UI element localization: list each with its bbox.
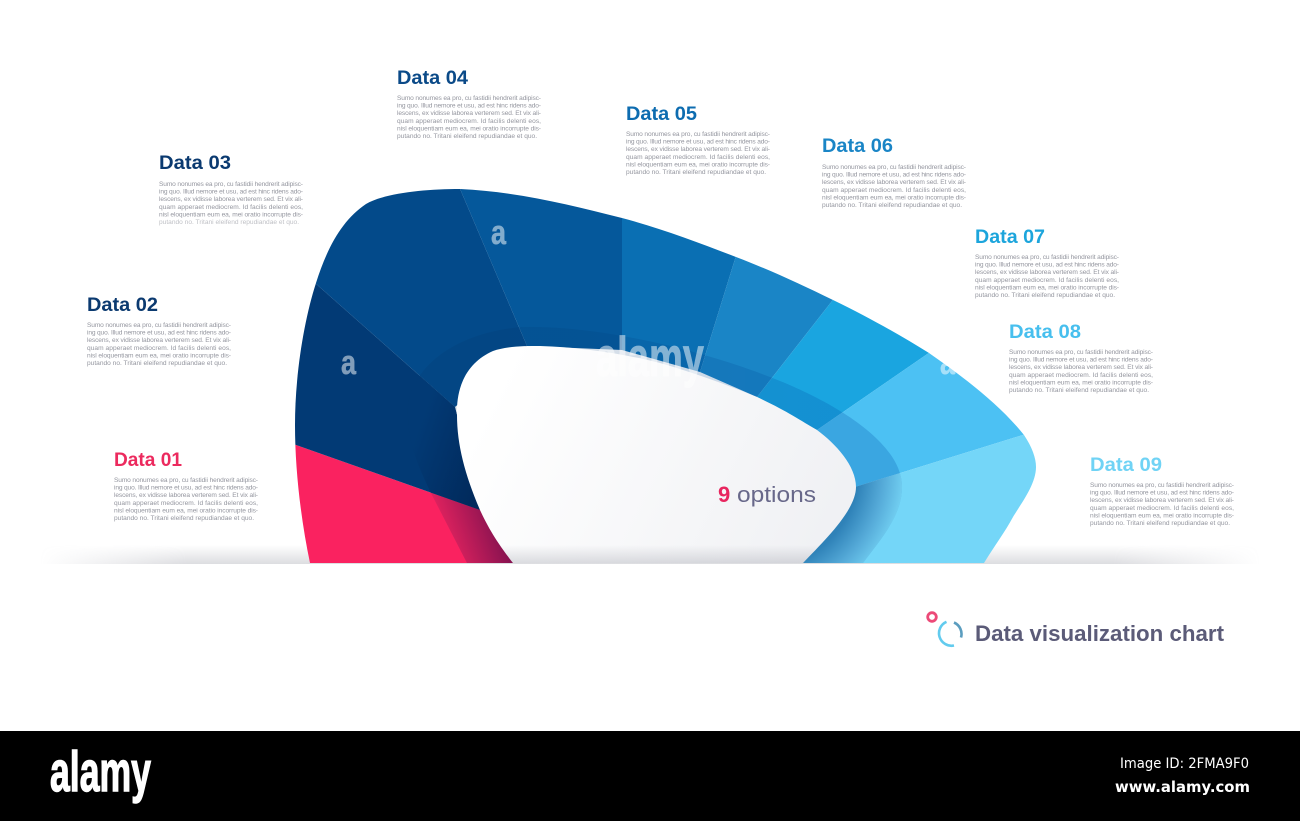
text block: Data 08: putando no. Tritani eleifend repudiandae et quo.	[1009, 387, 1149, 394]
text block: Data 01: nisl eloquentiam eum ea, mei oratio incorrupte dis-	[114, 507, 258, 514]
footer logo: Data visualization chart	[928, 613, 1225, 646]
segment 03	[316, 189, 527, 407]
text block: Data 03: ing quo. Illud nemore et usu, ad est hinc ridens ado-	[159, 189, 303, 196]
floor shade on inner shape	[504, 550, 814, 563]
text block: Data 06: Data 06	[822, 135, 893, 157]
text block: Data 02: lescens, ex vidisse laborea verterem sed. Et vix ali-	[87, 337, 231, 344]
ring shading on segment 02	[420, 376, 480, 510]
text block: Data 09: quam apperaet mediocrem. Id facilis delenti eos,	[1090, 505, 1234, 512]
text block: Data 02: nisl eloquentiam eum ea, mei oratio incorrupte dis-	[87, 352, 231, 359]
text block: Data 01: putando no. Tritani eleifend repudiandae et quo.	[114, 515, 254, 522]
segment 06	[700, 256, 833, 397]
text block: Data 05	[626, 103, 770, 176]
floor shadow	[76, 550, 1224, 564]
text block: Data 01	[114, 449, 258, 522]
icon: broken blue ring	[939, 622, 962, 646]
text block: Data 07: Sumo nonumes ea pro, cu fastidii hendrerit adipisc-	[975, 254, 1119, 261]
ring shading on segment 01	[431, 492, 513, 563]
text block: Data 09: ing quo. Illud nemore et usu, ad est hinc ridens ado-	[1090, 490, 1234, 497]
text block: Data 04: ing quo. Illud nemore et usu, ad est hinc ridens ado-	[397, 103, 541, 110]
watermark: alamy overlay: a	[940, 344, 956, 382]
text block: Data 01: Sumo nonumes ea pro, cu fastidii hendrerit adipisc-	[114, 477, 258, 484]
text block: Data 07: Data 07	[975, 226, 1045, 248]
text block: Data 04: Data 04	[397, 67, 468, 89]
text block: Data 09: lescens, ex vidisse laborea verterem sed. Et vix ali-	[1090, 497, 1234, 504]
text block: Data 02: Data 02	[87, 294, 158, 316]
text block: Data 02	[87, 294, 231, 367]
text block: Data 05: lescens, ex vidisse laborea verterem sed. Et vix ali-	[626, 146, 770, 153]
text block: Data 07	[975, 226, 1119, 299]
text block: Data 06: ing quo. Illud nemore et usu, ad est hinc ridens ado-	[822, 172, 966, 179]
text block: Data 01: Data 01	[114, 449, 182, 471]
website: www.alamy.com	[1115, 778, 1250, 796]
text block: Data 03: quam apperaet mediocrem. Id facilis delenti eos,	[159, 204, 303, 211]
image id: Image ID: 2FMA9F0	[1120, 756, 1249, 772]
watermark: alamy overlay	[341, 214, 956, 388]
text block: Data 04	[397, 67, 541, 140]
text block: Data 06: Sumo nonumes ea pro, cu fastidii hendrerit adipisc-	[822, 164, 966, 171]
segment 02	[295, 284, 480, 510]
text block: Data 01: quam apperaet mediocrem. Id facilis delenti eos,	[114, 500, 258, 507]
alamy wordmark: alamy	[50, 740, 151, 804]
centre label: 9 options: 9	[718, 482, 730, 507]
text block: Data 09	[1090, 454, 1234, 527]
text block: Data 08: lescens, ex vidisse laborea verterem sed. Et vix ali-	[1009, 364, 1153, 371]
watermark: alamy overlay: alamy	[596, 325, 704, 388]
inner shadow ring	[455, 328, 902, 553]
text block: Data 02: quam apperaet mediocrem. Id facilis delenti eos,	[87, 345, 231, 352]
text block: Data 03: putando no. Tritani eleifend repudiandae et quo.	[159, 219, 299, 226]
text block: Data 01: lescens, ex vidisse laborea verterem sed. Et vix ali-	[114, 492, 258, 499]
text block: Data 08: quam apperaet mediocrem. Id facilis delenti eos,	[1009, 372, 1153, 379]
text block: Data 05: Sumo nonumes ea pro, cu fastidii hendrerit adipisc-	[626, 131, 770, 138]
text block: Data 09: nisl eloquentiam eum ea, mei oratio incorrupte dis-	[1090, 512, 1234, 519]
text block: Data 07: quam apperaet mediocrem. Id facilis delenti eos,	[975, 277, 1119, 284]
stock photo footer band	[0, 731, 1300, 821]
text block: Data 06: lescens, ex vidisse laborea verterem sed. Et vix ali-	[822, 179, 966, 186]
text block: Data 04: nisl eloquentiam eum ea, mei oratio incorrupte dis-	[397, 125, 541, 132]
text block: Data 05: ing quo. Illud nemore et usu, ad est hinc ridens ado-	[626, 139, 770, 146]
text block: Data 06	[822, 135, 966, 209]
segment 01	[295, 444, 480, 563]
watermark: alamy overlay: a	[491, 214, 507, 252]
text block: Data 09: Data 09	[1090, 454, 1162, 476]
footer heading: Data visualization chart	[975, 621, 1225, 646]
text block: Data 04: Sumo nonumes ea pro, cu fastidii hendrerit adipisc-	[397, 95, 541, 102]
text block: Data 02: ing quo. Illud nemore et usu, ad est hinc ridens ado-	[87, 330, 231, 337]
text block: Data 02: Sumo nonumes ea pro, cu fastidii hendrerit adipisc-	[87, 322, 231, 329]
text block: Data 05: putando no. Tritani eleifend repudiandae et quo.	[626, 169, 766, 176]
text block: Data 03: nisl eloquentiam eum ea, mei oratio incorrupte dis-	[159, 211, 303, 218]
text block: Data 08: Sumo nonumes ea pro, cu fastidii hendrerit adipisc-	[1009, 349, 1153, 356]
text block: Data 07: nisl eloquentiam eum ea, mei oratio incorrupte dis-	[975, 284, 1119, 291]
text block: Data 04: lescens, ex vidisse laborea verterem sed. Et vix ali-	[397, 110, 541, 117]
text block: Data 06: nisl eloquentiam eum ea, mei oratio incorrupte dis-	[822, 194, 966, 201]
text block: Data 03: lescens, ex vidisse laborea verterem sed. Et vix ali-	[159, 196, 303, 203]
inner white shape	[457, 346, 856, 563]
text block: Data 04: putando no. Tritani eleifend repudiandae et quo.	[397, 133, 537, 140]
text block: Data 05: Data 05	[626, 103, 697, 125]
segment 09	[856, 434, 1036, 563]
segment 07	[757, 300, 929, 430]
text block: Data 09: Sumo nonumes ea pro, cu fastidii hendrerit adipisc-	[1090, 482, 1234, 489]
segment 08	[817, 353, 1024, 486]
text block: Data 02: putando no. Tritani eleifend repudiandae et quo.	[87, 360, 227, 367]
watermark: alamy overlay: a	[341, 344, 357, 382]
text block: Data 01: ing quo. Illud nemore et usu, ad est hinc ridens ado-	[114, 485, 258, 492]
text block: Data 08: nisl eloquentiam eum ea, mei oratio incorrupte dis-	[1009, 379, 1153, 386]
text block: Data 08: ing quo. Illud nemore et usu, ad est hinc ridens ado-	[1009, 357, 1153, 364]
icon: small pink ring	[928, 613, 936, 621]
text block: Data 03	[159, 152, 303, 226]
text block: Data 07: putando no. Tritani eleifend repudiandae et quo.	[975, 292, 1115, 299]
centre label: 9 options: options	[737, 482, 816, 507]
chart: nine option segmented shape	[295, 189, 1036, 563]
text block: Data 05: nisl eloquentiam eum ea, mei oratio incorrupte dis-	[626, 161, 770, 168]
text block: Data 08: Data 08	[1009, 321, 1081, 343]
ring shading on segment 09	[803, 474, 902, 563]
segment 05	[622, 218, 736, 372]
text block: Data 03: Sumo nonumes ea pro, cu fastidii hendrerit adipisc-	[159, 181, 303, 188]
text block: Data 06: quam apperaet mediocrem. Id facilis delenti eos,	[822, 187, 966, 194]
text block: Data 08	[1009, 321, 1153, 394]
text block: Data 03: Data 03	[159, 152, 231, 174]
text block: Data 09: putando no. Tritani eleifend repudiandae et quo.	[1090, 520, 1230, 527]
segment 04	[460, 189, 622, 350]
text block: Data 07: lescens, ex vidisse laborea verterem sed. Et vix ali-	[975, 269, 1119, 276]
text block: Data 07: ing quo. Illud nemore et usu, ad est hinc ridens ado-	[975, 262, 1119, 269]
text block: Data 04: quam apperaet mediocrem. Id facilis delenti eos,	[397, 118, 541, 125]
text block: Data 05: quam apperaet mediocrem. Id facilis delenti eos,	[626, 154, 770, 161]
text block: Data 06: putando no. Tritani eleifend repudiandae et quo.	[822, 202, 962, 209]
